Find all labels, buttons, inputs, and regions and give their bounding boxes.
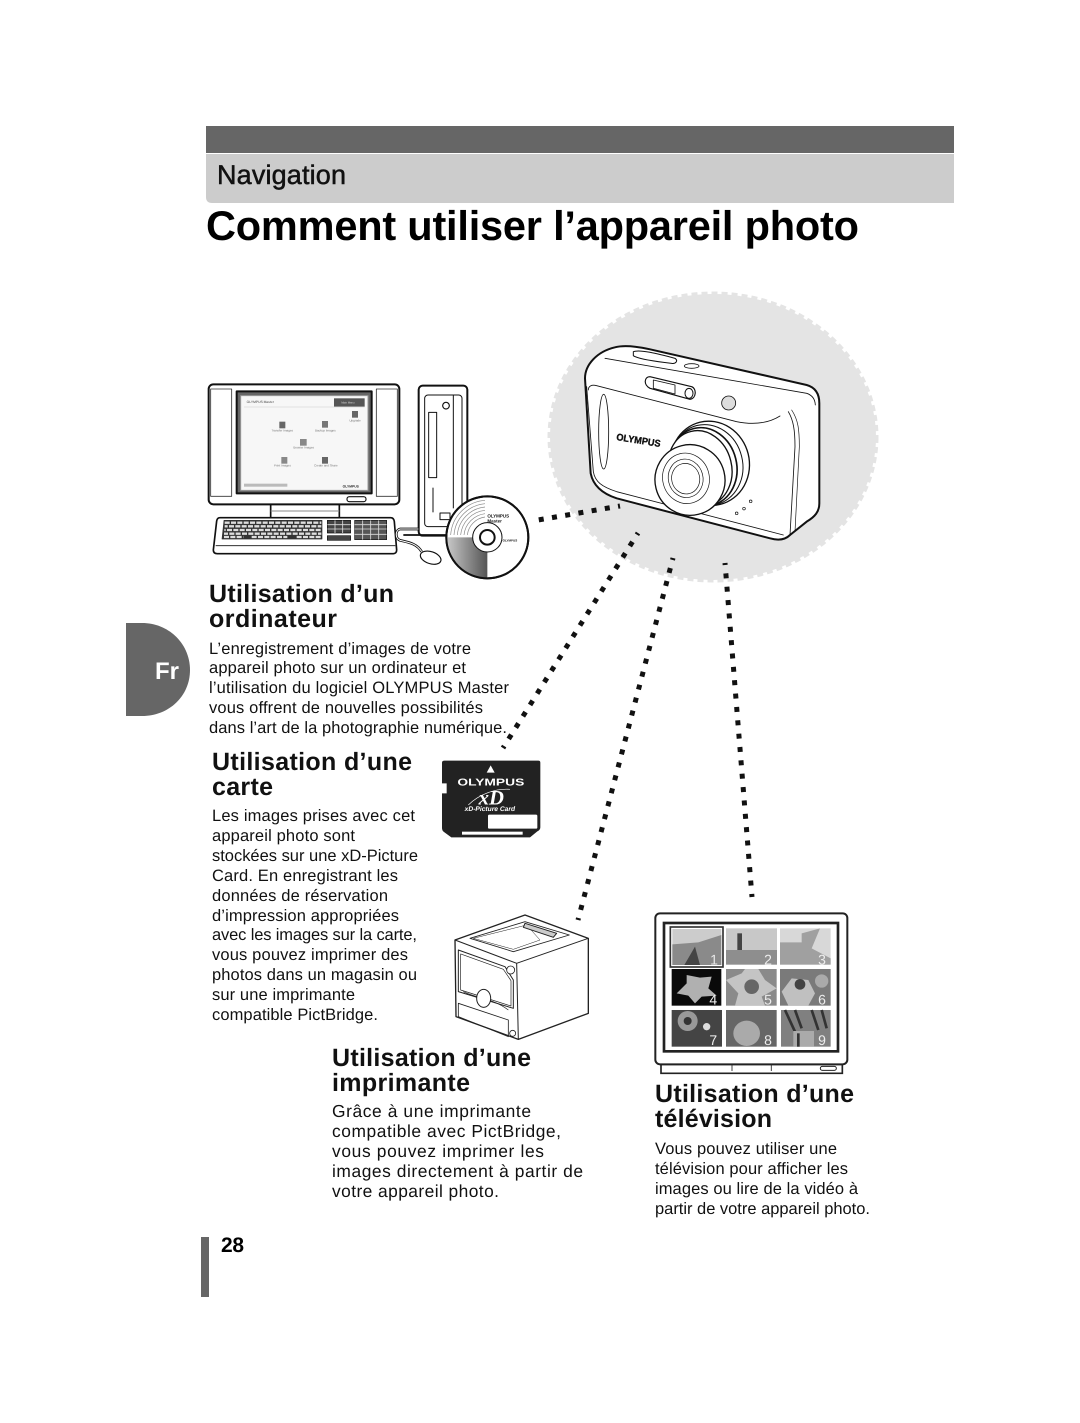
text: card: photos dans un magasin ou (212, 966, 417, 984)
text: card: Card. En enregistrant les (212, 867, 398, 885)
text: television: télévision pour afficher les (655, 1160, 848, 1178)
icon: xD-Picture card: xD-Picture Card (464, 805, 515, 813)
text: computer: vous offrent de nouvelles possibilités (209, 699, 483, 717)
thumbnail numbers: 9 (818, 1032, 826, 1048)
tower (419, 386, 467, 536)
text: television: Vous pouvez utiliser une (655, 1140, 837, 1158)
icon: computer with CD (209, 384, 528, 578)
text: card: appareil photo sont (212, 827, 355, 845)
heading: card: Utilisation d’une (212, 748, 412, 776)
CD label: Master (487, 518, 502, 523)
heading: television: télévision (655, 1105, 772, 1133)
heading: television (655, 1080, 854, 1133)
header band: Navigation (206, 126, 954, 203)
heading: card: carte (212, 773, 273, 801)
thumbnail grid (670, 927, 831, 1047)
screen labels: Transfer Images (271, 429, 293, 432)
text: computer: dans l’art de la photographie numérique. (209, 719, 507, 737)
language tab: Fr (126, 623, 190, 716)
thumbnail numbers: 5 (764, 992, 772, 1007)
thumbnail numbers: 3 (818, 952, 826, 967)
screen labels: Browse Images (293, 446, 314, 449)
lens barrel (647, 413, 758, 523)
text: television (655, 1140, 870, 1218)
text: printer: compatible avec PictBridge, (332, 1121, 561, 1141)
text: printer: votre appareil photo. (332, 1181, 499, 1201)
camera logo: OLYMPUS (616, 432, 661, 449)
heading: printer: imprimante (332, 1069, 470, 1097)
text: computer (209, 640, 510, 737)
section label: Navigation: Navigation (217, 160, 346, 190)
dotted connector lines (503, 506, 752, 920)
text: card: Les images prises avec cet (212, 807, 415, 825)
text: card: avec les images sur la carte, (212, 926, 417, 944)
icon: xD-Picture card: OLYMPUS (457, 777, 524, 788)
heading: computer (209, 580, 394, 633)
language tab: Fr: Fr (155, 658, 179, 685)
text: printer: Grâce à une imprimante (332, 1101, 531, 1121)
thumbnail numbers: 8 (764, 1032, 772, 1048)
screen labels: Backup Images (315, 429, 336, 432)
icon: xD-Picture card: xD (478, 786, 504, 809)
CD label: OLYMPUS (503, 539, 517, 542)
text: computer: L’enregistrement d’images de votre (209, 640, 471, 658)
icon: camera (585, 346, 819, 540)
thumbnail numbers: 1 (710, 952, 718, 967)
text: printer: images directement à partir de (332, 1161, 583, 1181)
heading: card (212, 748, 412, 801)
keyboard (213, 518, 397, 554)
scalloped grey circle behind camera (550, 294, 876, 580)
heading: television: Utilisation d’une (655, 1080, 854, 1108)
icon: printer (455, 915, 588, 1039)
page number marker: 28 (221, 1234, 244, 1257)
page number marker (201, 1234, 244, 1297)
screen labels: OLYMPUS (343, 485, 359, 488)
CD (446, 496, 528, 578)
heading: computer: Utilisation d’un (209, 580, 394, 608)
screen labels: Upgrade (349, 419, 361, 422)
thumbnail numbers: 4 (709, 992, 717, 1007)
text: printer (332, 1101, 583, 1201)
text: computer: l’utilisation du logiciel OLYMPUS Master (209, 679, 510, 697)
title: Comment utiliser l’appareil photo (206, 202, 859, 249)
text: television: images ou lire de la vidéo à (655, 1180, 859, 1198)
text: television: partir de votre appareil photo. (655, 1200, 870, 1218)
text: card: données de réservation (212, 887, 388, 905)
CD label: OLYMPUS (487, 514, 509, 519)
thumbnail numbers: 2 (764, 952, 772, 967)
icon: television with thumbnails (655, 913, 847, 1073)
text: card: vous pouvez imprimer des (212, 946, 408, 964)
screen labels: Create and Share (314, 464, 338, 467)
text: card (212, 807, 418, 1024)
screen labels: Print Images (274, 464, 291, 467)
text: card: d’impression appropriées (212, 907, 399, 925)
text: card: compatible PictBridge. (212, 1006, 378, 1024)
heading: printer (332, 1044, 531, 1097)
screen labels: OLYMPUS Master (247, 400, 274, 404)
cable and mouse (396, 529, 422, 552)
screen labels (244, 400, 361, 488)
monitor (209, 384, 399, 504)
screen labels: Main Menu (341, 401, 355, 404)
icon: xD-Picture card (442, 761, 540, 837)
CD label (487, 514, 517, 542)
stand (271, 505, 339, 518)
text: card: stockées sur une xD-Picture (212, 847, 418, 865)
thumbnail numbers: 6 (818, 992, 826, 1007)
thumbnail numbers: 7 (709, 1032, 717, 1048)
text: card: sur une imprimante (212, 986, 355, 1004)
heading: computer: ordinateur (209, 605, 337, 633)
text: printer: vous pouvez imprimer les (332, 1141, 544, 1161)
text: computer: appareil photo sur un ordinateur et (209, 659, 466, 677)
heading: printer: Utilisation d’une (332, 1044, 531, 1072)
thumbnail numbers (709, 952, 826, 1048)
